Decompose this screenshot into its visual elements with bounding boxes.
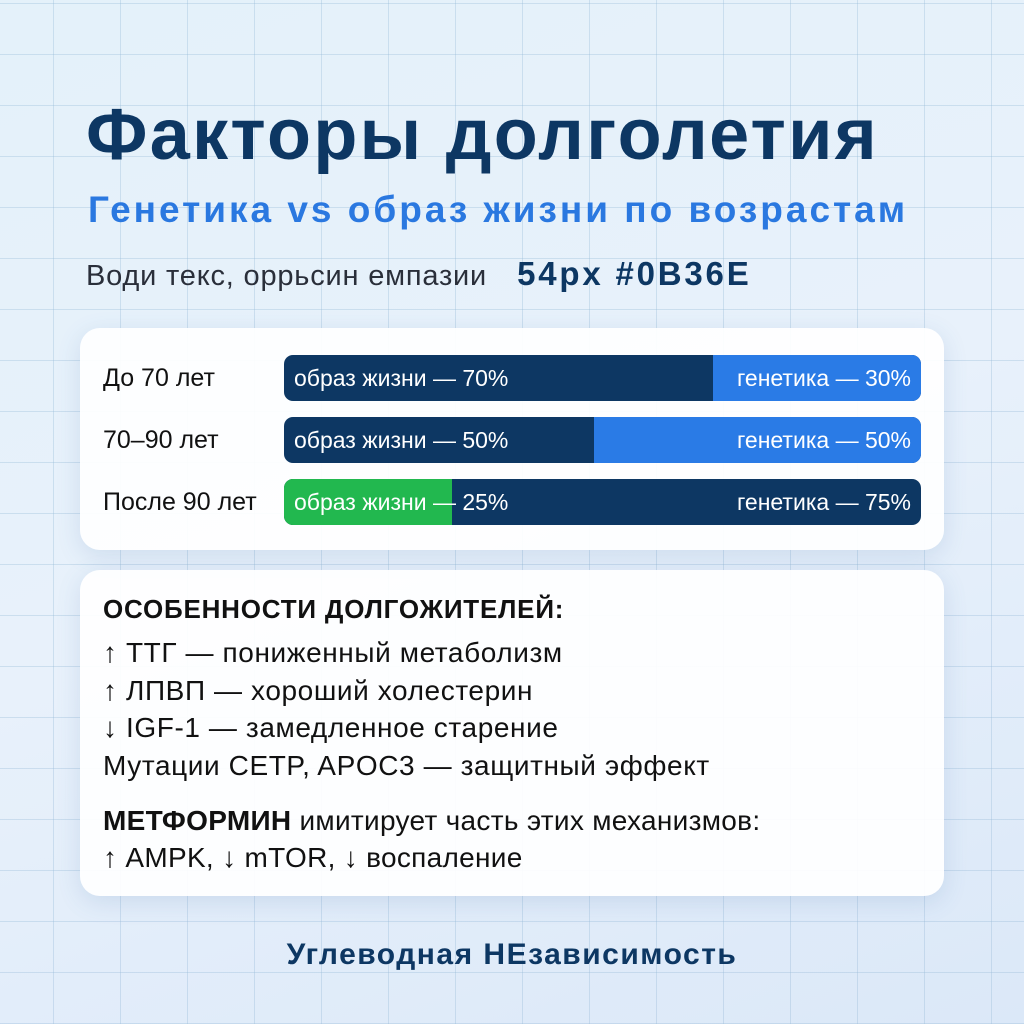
row: до 70: образ жизни — 70% bbox=[294, 365, 508, 391]
row: 70-90: генетика — 50% bbox=[737, 427, 911, 453]
metformin note bbox=[103, 805, 760, 873]
metformin note: ↑ AMPK, ↓ mTOR, ↓ воспаление bbox=[103, 842, 523, 873]
subtitle: Генетика vs образ жизни по возрастам bbox=[88, 189, 908, 230]
heading: ОСОБЕННОСТИ ДОЛГОЖИТЕЛЕЙ: bbox=[103, 594, 564, 624]
row: после 90 bbox=[103, 479, 921, 525]
row: после 90: генетика — 75% bbox=[737, 489, 911, 515]
title: Факторы долголетия bbox=[86, 95, 879, 175]
list: ↑ ТТГ — пониженный метаболизм bbox=[103, 637, 563, 668]
list: ↓ IGF-1 — замедленное старение bbox=[103, 712, 559, 743]
row: 70-90: 70–90 лет bbox=[103, 426, 219, 454]
row: после 90: После 90 лет bbox=[103, 488, 257, 516]
caption line: Води текс, оррьсин емпазии 54px #0B36E bbox=[86, 255, 752, 292]
footer: Углеводная НЕзависимость bbox=[287, 938, 737, 971]
panel: features bbox=[80, 570, 944, 896]
row: до 70: генетика — 30% bbox=[737, 365, 911, 391]
list: Мутации CETP, APOC3 — защитный эффект bbox=[103, 750, 710, 780]
row: до 70: До 70 лет bbox=[103, 364, 215, 392]
metformin note: МЕТФОРМИН имитирует часть этих механизмов: bbox=[103, 805, 760, 836]
row: до 70 bbox=[103, 355, 921, 401]
list: ↑ ЛПВП — хороший холестерин bbox=[103, 674, 533, 706]
list bbox=[103, 637, 710, 781]
row: после 90: образ жизни — 25% bbox=[294, 489, 508, 515]
row: 70-90 bbox=[103, 417, 921, 463]
panel: bars bbox=[80, 328, 944, 550]
row: 70-90: образ жизни — 50% bbox=[294, 427, 508, 453]
